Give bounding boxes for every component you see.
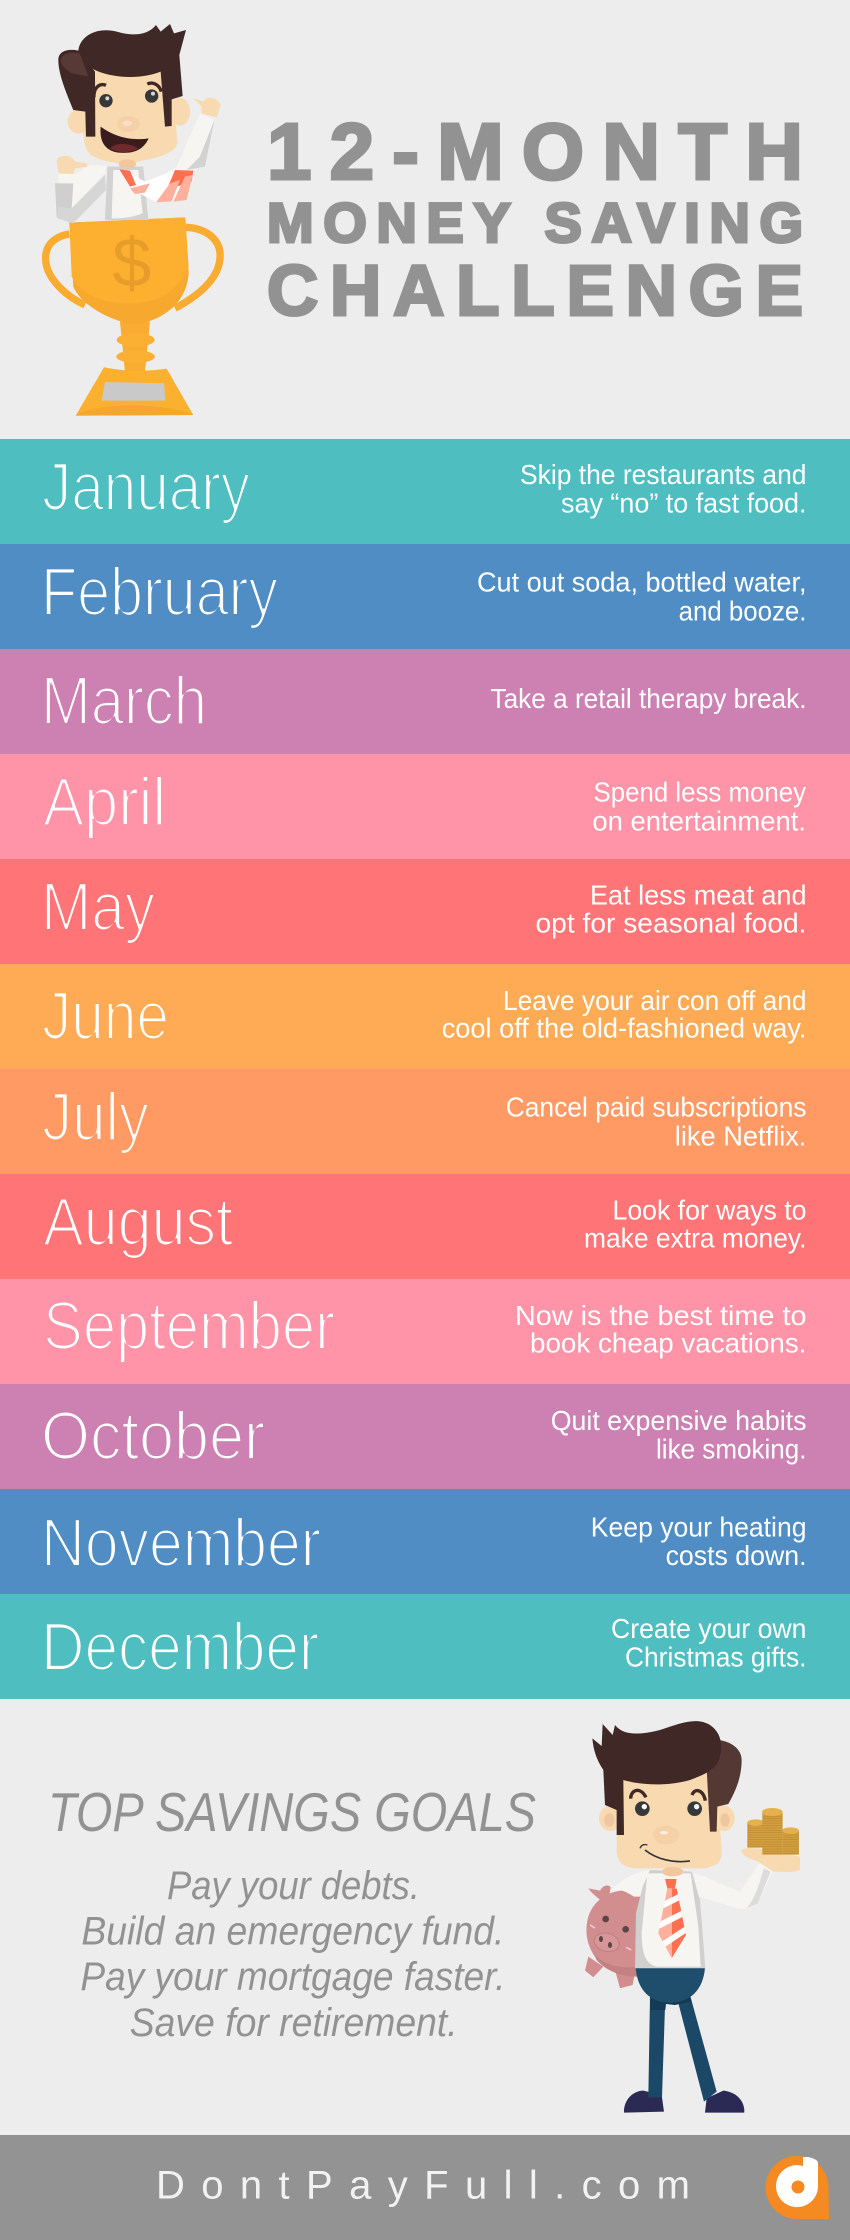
- panel: September: Now is the best time to: [515, 1300, 806, 1331]
- title: [267, 107, 803, 331]
- trophy: [46, 217, 220, 416]
- panel: April: on entertainment.: [592, 806, 806, 836]
- hair: [592, 1721, 742, 1835]
- shoes: [624, 2091, 744, 2113]
- tie: [658, 1879, 686, 1958]
- panel: September: book cheap vacations.: [530, 1328, 806, 1358]
- panel: March: March: [41, 663, 207, 739]
- panel: December: Christmas gifts.: [625, 1642, 806, 1672]
- panel: January: January: [42, 449, 250, 525]
- panel: October: October: [41, 1398, 265, 1474]
- panel: October: like smoking.: [656, 1434, 806, 1464]
- panel: November: [0, 1489, 850, 1594]
- panel: June: [0, 964, 850, 1069]
- footer bar: [0, 2132, 850, 2240]
- panel: April: Spend less money: [594, 776, 806, 808]
- title: CHALLENGE: [267, 252, 803, 331]
- shirt and arms: [55, 113, 214, 223]
- panel: January: Skip the restaurants and: [520, 459, 806, 490]
- panel: August: August: [43, 1184, 233, 1260]
- illustration: businessman in trophy: [46, 24, 221, 416]
- panel: February: February: [41, 554, 278, 630]
- ears: [68, 98, 190, 134]
- icon: DontPayFull logo: [766, 2156, 829, 2219]
- panel: October: Quit expensive habits: [551, 1405, 806, 1436]
- panel: March: [0, 649, 850, 754]
- panel: May: Eat less meat and: [590, 880, 806, 910]
- panel: August: [0, 1174, 850, 1279]
- trousers: [636, 1968, 717, 2102]
- panel: December: December: [41, 1609, 319, 1685]
- panel: February: [0, 544, 850, 649]
- piggy bank: [585, 1885, 642, 1988]
- panel: January: [0, 439, 850, 544]
- panel: July: July: [42, 1079, 149, 1155]
- hands: [57, 98, 221, 174]
- face: [94, 83, 161, 169]
- text block: savings goals list: Build an emergency fund.: [81, 1910, 504, 1954]
- panel: June: cool off the old-fashioned way.: [442, 1012, 806, 1044]
- panel: October: [0, 1384, 850, 1489]
- shirt and raised arm: [610, 1863, 773, 1968]
- head: [83, 67, 177, 163]
- ears: [599, 1806, 735, 1831]
- hair: [58, 24, 186, 137]
- panel: November: costs down.: [666, 1540, 806, 1571]
- title: MONEY SAVING: [267, 191, 803, 254]
- panel: July: like Netflix.: [675, 1120, 806, 1152]
- panel: May: May: [41, 869, 155, 945]
- panel: December: [0, 1594, 850, 1699]
- coins and hand: [742, 1808, 800, 1872]
- panel: February: and booze.: [679, 596, 806, 626]
- panel: July: [0, 1069, 850, 1174]
- panel: November: November: [41, 1505, 321, 1581]
- panel: December: Create your own: [611, 1613, 806, 1644]
- panel: February: Cut out soda, bottled water,: [477, 566, 806, 598]
- title: 12-MONTH: [267, 107, 803, 196]
- panel: April: April: [43, 764, 166, 840]
- panel: May: opt for seasonal food.: [536, 908, 806, 938]
- panel: March: Take a retail therapy break.: [490, 683, 806, 714]
- panel: June: June: [42, 978, 169, 1054]
- panel: November: Keep your heating: [591, 1512, 806, 1542]
- panel: April: [0, 754, 850, 859]
- face: [631, 1790, 705, 1876]
- panel: May: [0, 859, 850, 964]
- trophy: $: [112, 224, 151, 302]
- text block: savings goals list: Pay your debts.: [167, 1864, 420, 1908]
- panel: June: Leave your air con off and: [503, 985, 806, 1016]
- tie: [119, 169, 193, 202]
- panel: August: make extra money.: [584, 1222, 806, 1254]
- text block: savings goals list: Save for retirement.: [130, 2001, 458, 2045]
- panel: August: Look for ways to: [612, 1194, 806, 1226]
- panel: September: September: [43, 1288, 335, 1364]
- panel: July: Cancel paid subscriptions: [506, 1092, 806, 1122]
- head: [617, 1767, 722, 1868]
- illustration: businessman with piggy bank and coins: [585, 1721, 800, 2113]
- footer bar: DontPayFull.com: [156, 2164, 690, 2208]
- heading: top savings goals: TOP SAVINGS GOALS: [48, 1781, 536, 1843]
- panel: September: [0, 1279, 850, 1384]
- text block: savings goals list: [80, 1864, 505, 2045]
- panel: January: say “no” to fast food.: [561, 488, 806, 518]
- text block: savings goals list: Pay your mortgage faster.: [80, 1955, 505, 1999]
